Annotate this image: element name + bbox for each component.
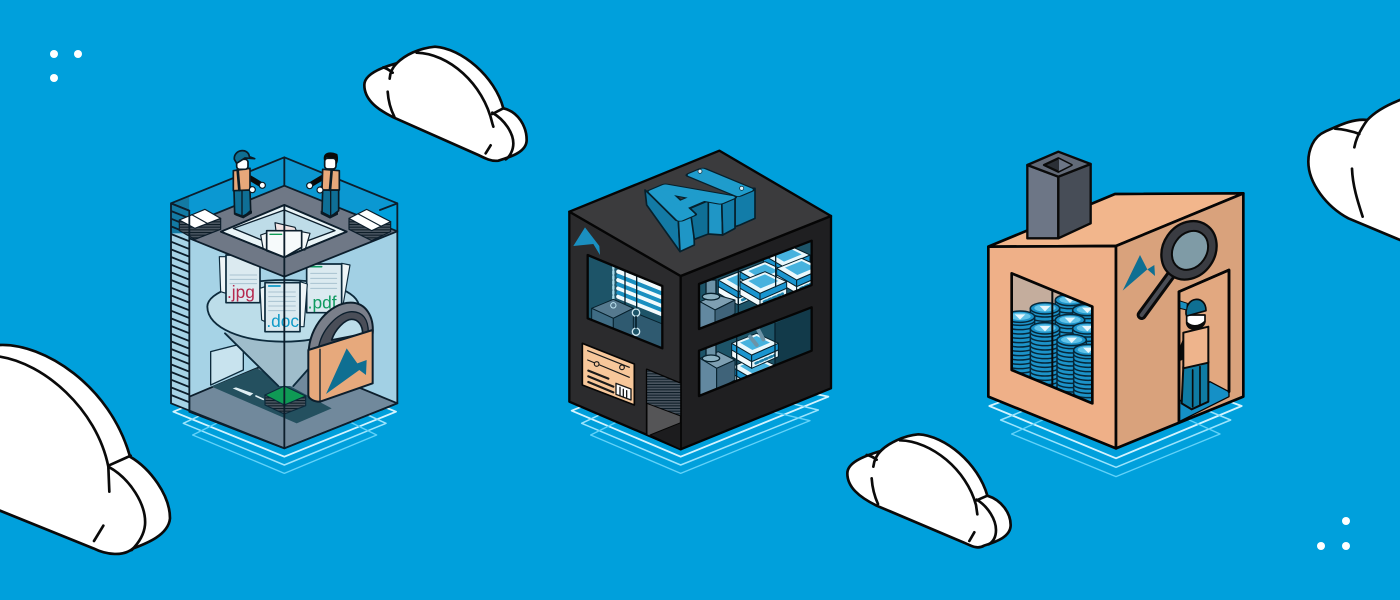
window: upper right bbox=[700, 242, 810, 328]
paper stack: left bbox=[179, 209, 221, 239]
magnifying glass bbox=[1142, 210, 1228, 315]
floor reflection layers bbox=[173, 367, 396, 473]
roof bbox=[988, 193, 1243, 247]
building 3: inspection house bbox=[988, 152, 1243, 477]
floor reflection layers bbox=[572, 367, 828, 473]
coin stacks bbox=[1013, 295, 1091, 401]
paper: pdf bbox=[307, 263, 350, 313]
paper: jpg: .jpg bbox=[227, 282, 255, 302]
funnel bbox=[207, 280, 359, 386]
window frame: lower right bbox=[699, 307, 812, 396]
loading door bbox=[647, 369, 681, 449]
cloud: top centre-left bbox=[364, 47, 527, 161]
AI roof lettering bbox=[616, 162, 769, 252]
platform frame bbox=[189, 186, 397, 277]
back crate bbox=[211, 343, 243, 385]
figure: worker with cap bbox=[233, 151, 265, 218]
green paper stack bbox=[265, 386, 306, 414]
window frame: left bbox=[588, 255, 662, 348]
window frame: upper right bbox=[699, 241, 812, 329]
right wall bbox=[681, 216, 831, 449]
left wall bbox=[569, 212, 681, 449]
floor reflection layers bbox=[989, 360, 1242, 477]
padlock bbox=[308, 303, 373, 402]
doorway floor bbox=[1179, 382, 1229, 422]
building 1: glass data vault bbox=[171, 151, 397, 473]
wall logo bbox=[573, 227, 600, 255]
cloud: right edge bbox=[1308, 99, 1400, 241]
floor bbox=[189, 357, 397, 448]
figure: inspector bbox=[1179, 299, 1208, 409]
paper: doc: .doc bbox=[266, 311, 299, 331]
letter face: AI bbox=[616, 162, 769, 226]
extruded sides of the letters bbox=[645, 188, 755, 252]
decorative dots: top left bbox=[50, 50, 82, 82]
letter outline: AI bbox=[616, 162, 769, 226]
window frame bbox=[1012, 273, 1092, 403]
front wall bbox=[988, 246, 1116, 448]
control panel placard bbox=[582, 343, 634, 405]
dark shadow patch with slot bbox=[212, 368, 332, 423]
box frame edges bbox=[171, 157, 397, 448]
decorative dots: bottom right bbox=[1317, 517, 1350, 550]
paper: pdf: .pdf bbox=[308, 292, 337, 312]
window: left bbox=[588, 257, 662, 346]
paper: doc bbox=[260, 282, 307, 332]
glass walls bbox=[171, 157, 397, 433]
paper stack: right bbox=[349, 209, 391, 241]
window: lower right bbox=[700, 309, 810, 394]
chimney bbox=[1027, 152, 1091, 238]
paper: jpg bbox=[219, 255, 260, 303]
roof bbox=[569, 151, 831, 276]
cloud: bottom centre-right bbox=[847, 434, 1011, 547]
door frame edge bbox=[1179, 270, 1229, 422]
doorway bbox=[1179, 270, 1229, 422]
ladder bbox=[171, 195, 189, 413]
hopper opening with papers bbox=[221, 205, 347, 257]
coin window bbox=[1013, 276, 1091, 402]
figure: worker with dark hair bbox=[307, 152, 339, 219]
side wall bbox=[1116, 193, 1243, 448]
logo on padlock bbox=[326, 348, 367, 394]
wall logo bbox=[1123, 255, 1155, 291]
building 2: AI factory bbox=[569, 151, 831, 473]
cloud: bottom left bbox=[0, 345, 170, 554]
